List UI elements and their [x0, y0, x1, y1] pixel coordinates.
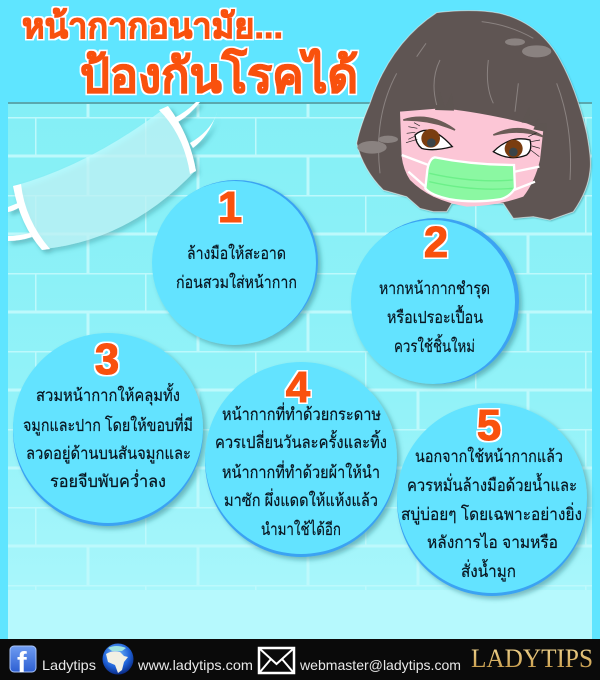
- step 4 circle: ควรเปลี่ยนวันละครั้งและทิ้ง: [215, 430, 387, 452]
- step 3 circle: สวมหน้ากากให้คลุมทั้ง: [36, 383, 180, 406]
- left eye: [406, 123, 452, 150]
- hair highlights: [357, 38, 551, 154]
- step 4 circle: [205, 362, 397, 557]
- step 1 circle: 1: [218, 183, 242, 232]
- icon: facebook: f: [17, 647, 27, 679]
- step 2 circle: 2: [424, 218, 448, 267]
- title: [22, 7, 358, 103]
- step 2 circle: หรือเปรอะเปื้อน: [387, 305, 483, 327]
- step 1 circle: ก่อนสวมใส่หน้ากาก: [176, 272, 297, 292]
- icon: globe: [102, 644, 134, 674]
- step 5 circle: นอกจากใช้หน้ากากแล้ว: [415, 446, 563, 466]
- step 5 circle: สั่งน้ำมูก: [461, 559, 516, 582]
- step 1 circle: [152, 180, 318, 345]
- hair strands: [379, 22, 571, 180]
- step 5 circle: 5: [477, 401, 501, 450]
- icon: envelope: [259, 648, 294, 673]
- step 3 circle: ลวดอยู่ด้านบนสันจมูกและ: [26, 444, 191, 464]
- green face mask: [425, 157, 515, 201]
- step 4 circle: หน้ากากที่ทำด้วยผ้าให้นำ: [222, 460, 380, 482]
- illustration: girl wearing green mask: [357, 11, 590, 220]
- face: [400, 108, 543, 207]
- bangs spikes: [435, 92, 547, 132]
- panel: brick wall background: [8, 102, 592, 639]
- step 5 circle: ควรหมั่นล้างมือด้วยน้ำและ: [407, 473, 577, 495]
- ear straps: [402, 155, 539, 190]
- step 3 circle: รอยจีบพับคว่ำลง: [50, 469, 166, 491]
- title: หน้ากากอนามัย...: [22, 7, 283, 46]
- step 2 circle: หากหน้ากากชำรุด: [379, 279, 490, 299]
- icon: facebook: [10, 646, 36, 679]
- title: ป้องกันโรคได้: [80, 47, 358, 103]
- hair: [357, 11, 590, 220]
- email: webmaster@ladytips.com: [299, 657, 461, 673]
- logo: LADYTIPS: [471, 644, 593, 673]
- step 3 circle: [13, 333, 203, 526]
- illustration: surgical mask: [8, 102, 217, 250]
- step 1 circle: ล้างมือให้สะอาด: [187, 243, 286, 263]
- step 4 circle: 4: [286, 363, 311, 412]
- step 4 circle: มาซัก ผึ่งแดดให้แห้งแล้ว: [224, 488, 378, 510]
- step 5 circle: สบู่บ่อยๆ โดยเฉพาะอย่างยิ่ง: [401, 502, 582, 525]
- step 2 circle: ควรใช้ชิ้นใหม่: [394, 334, 475, 356]
- step 2 circle: [351, 218, 519, 384]
- step 4 circle: นำมาใช้ได้อีก: [261, 519, 341, 539]
- website: www.ladytips.com: [137, 657, 253, 673]
- step 5 circle: [397, 401, 587, 596]
- step 3 circle: 3: [95, 335, 119, 384]
- step 3 circle: จมูกและปาก โดยให้ขอบที่มี: [23, 413, 193, 436]
- facebook label: Ladytips: [42, 657, 96, 673]
- step 4 circle: หน้ากากที่ทำด้วยกระดาษ: [222, 402, 381, 424]
- eyebrows: [403, 117, 543, 137]
- right eye: [493, 133, 540, 158]
- step 5 circle: หลังการไอ จามหรือ: [427, 532, 558, 552]
- footer bar: [0, 639, 600, 680]
